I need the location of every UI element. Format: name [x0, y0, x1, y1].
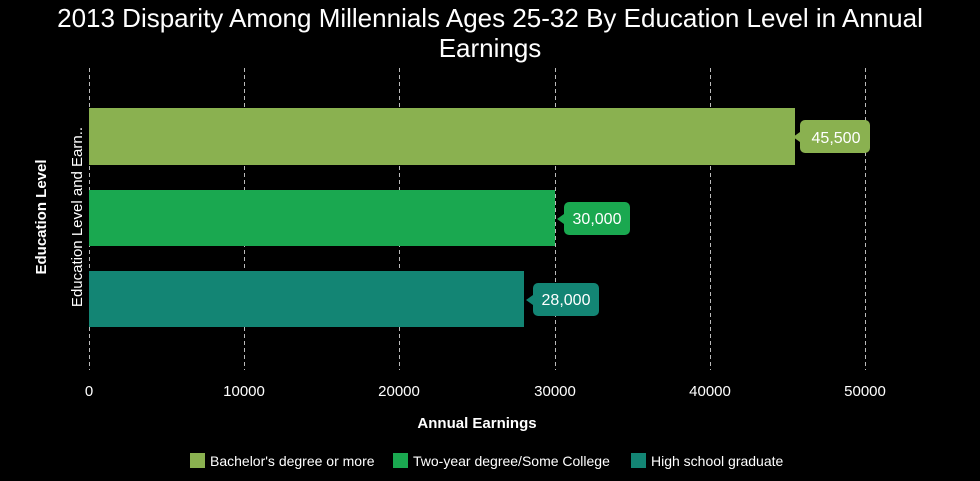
legend: Bachelor's degree or more: [210, 453, 375, 469]
y axis title: Education Level: [33, 159, 50, 275]
bar: Bachelor's degree: [89, 108, 870, 165]
x tick labels: 40000: [689, 383, 731, 400]
callout: 28,000: 28,000: [542, 292, 591, 309]
title: [57, 3, 923, 63]
bar: High school graduate: [89, 271, 599, 327]
callout: 30,000: 30,000: [573, 211, 622, 228]
legend: [190, 453, 784, 469]
x tick labels: 20000: [378, 383, 420, 400]
legend: High school graduate: [651, 453, 784, 469]
callout: 28,000: [526, 283, 599, 316]
legend: Two-year degree/Some College: [413, 453, 610, 469]
x tick labels: 30000: [534, 383, 576, 400]
callout: 45,500: [793, 120, 870, 153]
y category label: Education Level and Earn..: [69, 127, 86, 307]
title: Earnings: [439, 33, 541, 63]
bar: Two-year degree: [89, 190, 630, 246]
x tick labels: 10000: [223, 383, 265, 400]
x tick labels: [85, 383, 886, 400]
x tick labels: 50000: [844, 383, 886, 400]
callout: 45,500: 45,500: [812, 130, 861, 147]
x axis title: Annual Earnings: [417, 415, 537, 432]
callout: 30,000: [557, 202, 630, 235]
title: 2013 Disparity Among Millennials Ages 25-32 By Education Level in Annual: [57, 3, 923, 33]
x tick labels: 0: [85, 383, 93, 400]
